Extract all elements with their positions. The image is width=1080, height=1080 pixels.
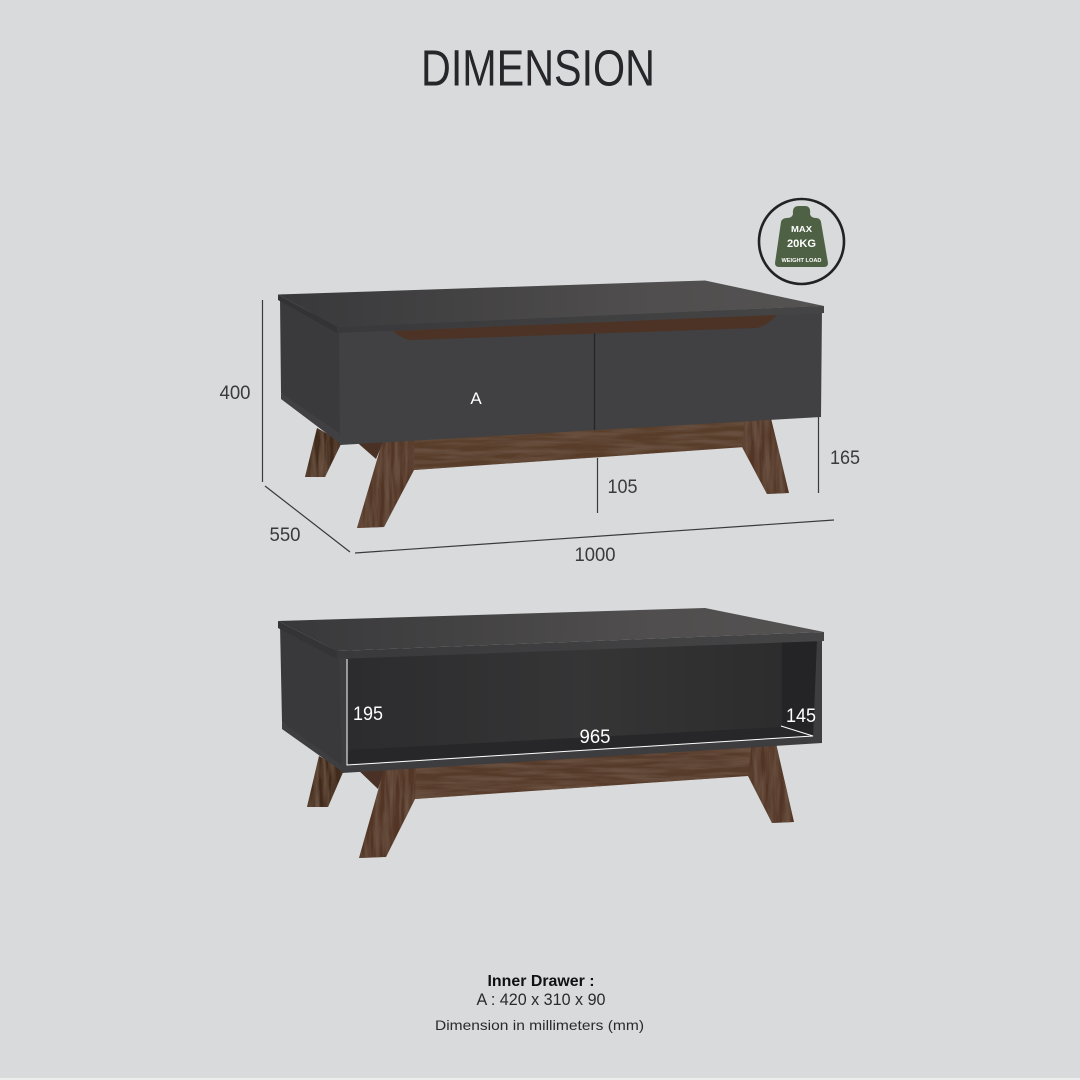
rear rail segment (354, 766, 386, 789)
table top left edge (278, 294, 337, 333)
cabinet front frame (339, 634, 822, 773)
label 965: 965 (580, 727, 610, 748)
width line (355, 520, 834, 553)
rear rail segment (352, 438, 385, 459)
drawer fronts (339, 306, 822, 445)
inner measurement lines (347, 659, 813, 765)
front left leg (359, 764, 416, 858)
label 105: 105 (608, 477, 638, 498)
base rail (405, 742, 756, 799)
back left leg (305, 428, 342, 477)
inner drawer heading: Inner Drawer : (488, 973, 594, 990)
table top (278, 280, 824, 327)
units note: Dimension in millimeters (mm) (435, 1017, 644, 1033)
label 400: 400 (220, 383, 250, 404)
label 195: 195 (353, 704, 383, 725)
table top front edge (337, 632, 824, 659)
table with closed drawers (278, 280, 824, 528)
dimension annotations: closed table (220, 300, 860, 566)
drawer finger pull notch (393, 314, 778, 340)
front right leg (742, 410, 789, 494)
front right leg (748, 739, 794, 823)
icon: max weight load badge: 20KG (787, 238, 816, 250)
depth line (265, 486, 350, 552)
icon: max weight load badge: WEIGHT LOAD (782, 258, 822, 264)
table top (278, 608, 824, 651)
table with open compartment (278, 608, 824, 858)
table top front edge (337, 306, 824, 333)
footer notes (435, 973, 644, 1033)
label 165: 165 (830, 448, 860, 469)
icon: max weight load badge: MAX (791, 225, 813, 234)
cabinet side panel (280, 624, 344, 772)
drawer label: A (470, 389, 482, 408)
title: DIMENSION (421, 40, 655, 96)
back left leg (307, 756, 344, 807)
height line (262, 300, 264, 482)
inner drawer size: A : 420 x 310 x 90 (476, 991, 606, 1009)
label 145: 145 (786, 706, 816, 727)
table top left edge (278, 621, 337, 659)
cabinet side panel (280, 297, 342, 445)
label 550: 550 (270, 525, 300, 546)
leg height line (818, 417, 820, 493)
compartment right wall (782, 639, 817, 736)
compartment back wall (347, 639, 817, 764)
clearance line (596, 458, 598, 513)
label 1000: 1000 (574, 545, 616, 566)
icon: max weight load badge (759, 199, 844, 284)
drawer divider (594, 330, 596, 430)
base rail (405, 414, 752, 470)
compartment floor (347, 727, 813, 764)
front left leg (357, 434, 414, 528)
